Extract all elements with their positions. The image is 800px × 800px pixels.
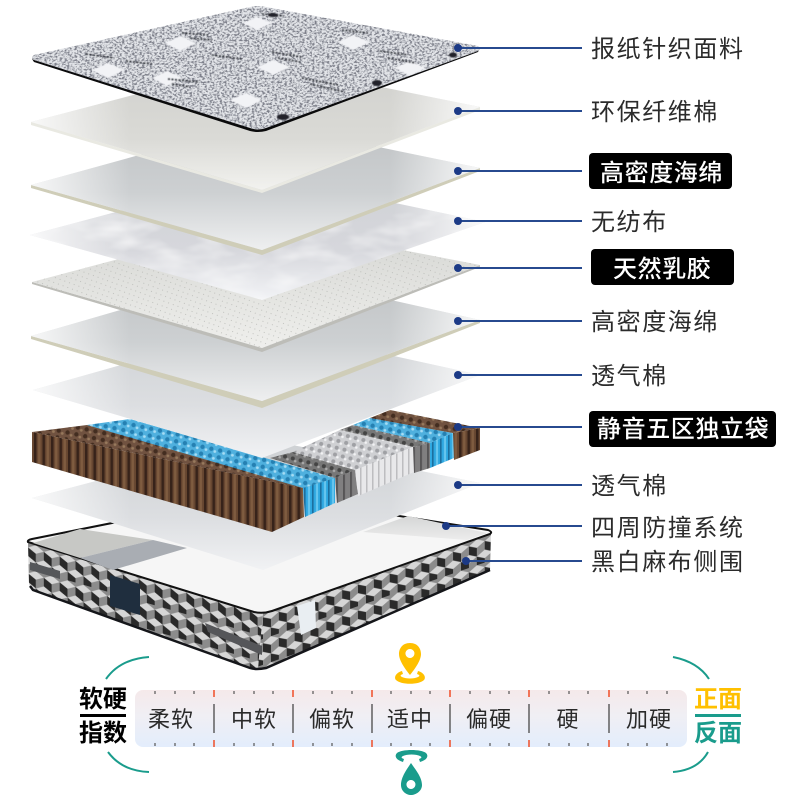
leader dot xyxy=(454,44,462,52)
leader line xyxy=(458,374,582,376)
label: non-woven fabric xyxy=(454,209,668,236)
layer: breathable cotton xyxy=(33,326,480,458)
base surface light shading xyxy=(33,529,153,558)
legend: front side and back side xyxy=(694,686,742,747)
spring side dark xyxy=(413,443,430,473)
label text: 高密度海绵 xyxy=(591,309,719,336)
foam top xyxy=(31,122,480,250)
leader line xyxy=(458,320,582,322)
side tag band left xyxy=(30,562,60,579)
sheet xyxy=(33,326,480,458)
pale quilted patches xyxy=(92,17,426,108)
tip fade xyxy=(32,438,480,570)
spring top grey zone xyxy=(270,452,355,478)
label text: 环保纤维棉 xyxy=(591,99,719,126)
layer: breathable cotton bottom xyxy=(32,438,480,570)
leader dot xyxy=(454,264,462,272)
sheet xyxy=(30,174,485,300)
divider xyxy=(80,714,126,717)
black badge xyxy=(589,153,732,189)
label text: 天然乳胶 xyxy=(613,256,711,283)
mattress base: black and white linen sides xyxy=(28,494,491,669)
fiber edge xyxy=(31,107,480,193)
tip fade xyxy=(33,326,480,458)
scale labels xyxy=(148,707,672,732)
leader line xyxy=(458,110,582,112)
red section ticks xyxy=(214,690,609,747)
label: high-density foam xyxy=(454,309,719,336)
leader line xyxy=(446,525,582,527)
leader dot xyxy=(454,167,462,175)
spring top white zone xyxy=(293,430,413,470)
tip fade xyxy=(31,270,480,401)
decorative teal brackets xyxy=(106,657,709,772)
spring top surface blue xyxy=(87,419,335,488)
label text: 四周防撞系统 xyxy=(591,515,745,542)
foam top xyxy=(31,270,480,401)
leader line xyxy=(458,426,582,428)
scale labels: 偏软 xyxy=(309,707,355,732)
scale labels: 中软 xyxy=(231,707,277,732)
foam edge xyxy=(31,168,480,255)
leader line xyxy=(458,267,582,269)
sheet xyxy=(32,438,480,570)
leader dot xyxy=(454,423,462,431)
scale background bar xyxy=(135,690,687,747)
latex pinholes xyxy=(32,222,480,348)
pin ring xyxy=(396,750,427,762)
latex edge xyxy=(32,265,480,352)
spring side brown xyxy=(453,428,480,460)
layer: eco fiber cotton xyxy=(31,62,480,193)
leader dot xyxy=(454,371,462,379)
label: silent five-zone pocket springs highlighted xyxy=(454,411,776,447)
scale labels: 加硬 xyxy=(626,707,672,732)
side tag band front xyxy=(205,623,262,655)
fiber top xyxy=(31,62,480,190)
heading: firmness index: 指数 xyxy=(79,720,127,747)
scale labels: 适中 xyxy=(387,707,433,732)
heading: firmness index: 软硬 xyxy=(79,686,127,713)
label text: 黑白麻布侧围 xyxy=(591,549,745,576)
scale labels: 柔软 xyxy=(148,707,194,732)
label text: 无纺布 xyxy=(591,209,668,236)
layer: natural latex xyxy=(32,222,480,352)
hang tag xyxy=(297,600,316,635)
layer: silent five-zone pocket springs xyxy=(32,410,480,532)
base top surface xyxy=(28,494,491,613)
leader dot xyxy=(454,317,462,325)
top fabric edge xyxy=(32,48,480,132)
spring side white xyxy=(355,447,414,496)
scale labels: 硬 xyxy=(556,707,580,732)
base surface dark shading xyxy=(80,540,187,570)
leader dot xyxy=(454,481,462,489)
label: newspaper knit fabric xyxy=(454,36,745,63)
leader line xyxy=(458,47,582,49)
layer: non-woven fabric xyxy=(30,202,484,300)
leader line xyxy=(458,220,582,222)
label text: 高密度海绵 xyxy=(600,160,723,187)
brand label xyxy=(110,575,140,615)
leader dot xyxy=(442,522,450,530)
leader dot xyxy=(454,217,462,225)
black badge xyxy=(591,249,734,285)
leader line xyxy=(458,484,582,486)
label text: 静音五区独立袋 xyxy=(597,416,769,443)
label: high-density foam highlighted xyxy=(454,153,732,189)
spring top surface brown front xyxy=(32,425,335,488)
foam edge xyxy=(31,320,480,408)
top fabric surface xyxy=(32,6,480,130)
leader line xyxy=(458,170,582,172)
tip fade xyxy=(31,62,480,190)
layer: high-density foam upper xyxy=(31,122,480,255)
layer: newspaper knit top fabric xyxy=(30,5,482,132)
dark blotches xyxy=(268,13,457,120)
pin body xyxy=(401,763,422,795)
base surface right shading xyxy=(363,516,487,540)
scale labels: 偏硬 xyxy=(466,707,512,732)
label text: 透气棉 xyxy=(591,473,668,500)
label: black and white linen side xyxy=(462,549,745,576)
label text: 报纸针织面料 xyxy=(591,36,745,63)
divider xyxy=(695,714,741,717)
spring top blue zone xyxy=(353,418,453,443)
tip fade xyxy=(30,174,485,300)
spring top back brown xyxy=(370,410,480,433)
leader dot xyxy=(454,107,462,115)
label: natural latex highlighted xyxy=(454,249,734,285)
label: breathable cotton xyxy=(454,363,668,390)
pin ring xyxy=(395,671,425,684)
layer: high-density foam lower xyxy=(31,270,480,408)
label text: 透气棉 xyxy=(591,363,668,390)
pin body xyxy=(399,643,421,675)
spring front face brown xyxy=(32,432,304,532)
label: perimeter anti-collision system xyxy=(442,515,745,542)
spring side grey xyxy=(335,470,358,503)
section dividers xyxy=(214,704,609,733)
base right side panel xyxy=(258,533,491,669)
spring face blue xyxy=(303,478,335,517)
legend: front side and back side: 反面 xyxy=(694,720,742,747)
latex top xyxy=(32,222,480,348)
firmness index scale xyxy=(135,690,687,747)
base bottom edge xyxy=(30,570,490,669)
cloud texture xyxy=(97,216,428,284)
icon: teal inverted location pin xyxy=(396,750,427,795)
label: eco fiber cotton xyxy=(454,99,719,126)
minor ticks xyxy=(155,691,667,746)
tip fade xyxy=(31,122,480,250)
top fabric print texture xyxy=(30,5,482,131)
spring side blue xyxy=(430,433,454,468)
label: breathable cotton lower xyxy=(454,473,668,500)
dark print marks xyxy=(86,14,416,92)
leader line xyxy=(466,560,582,562)
spring top dark zone xyxy=(340,425,430,447)
leader dot xyxy=(462,557,470,565)
base left side panel xyxy=(28,543,263,669)
heading: firmness index xyxy=(79,686,127,747)
icon: yellow location pin xyxy=(395,643,425,684)
legend: front side and back side: 正面 xyxy=(694,686,742,713)
black badge xyxy=(589,411,776,447)
